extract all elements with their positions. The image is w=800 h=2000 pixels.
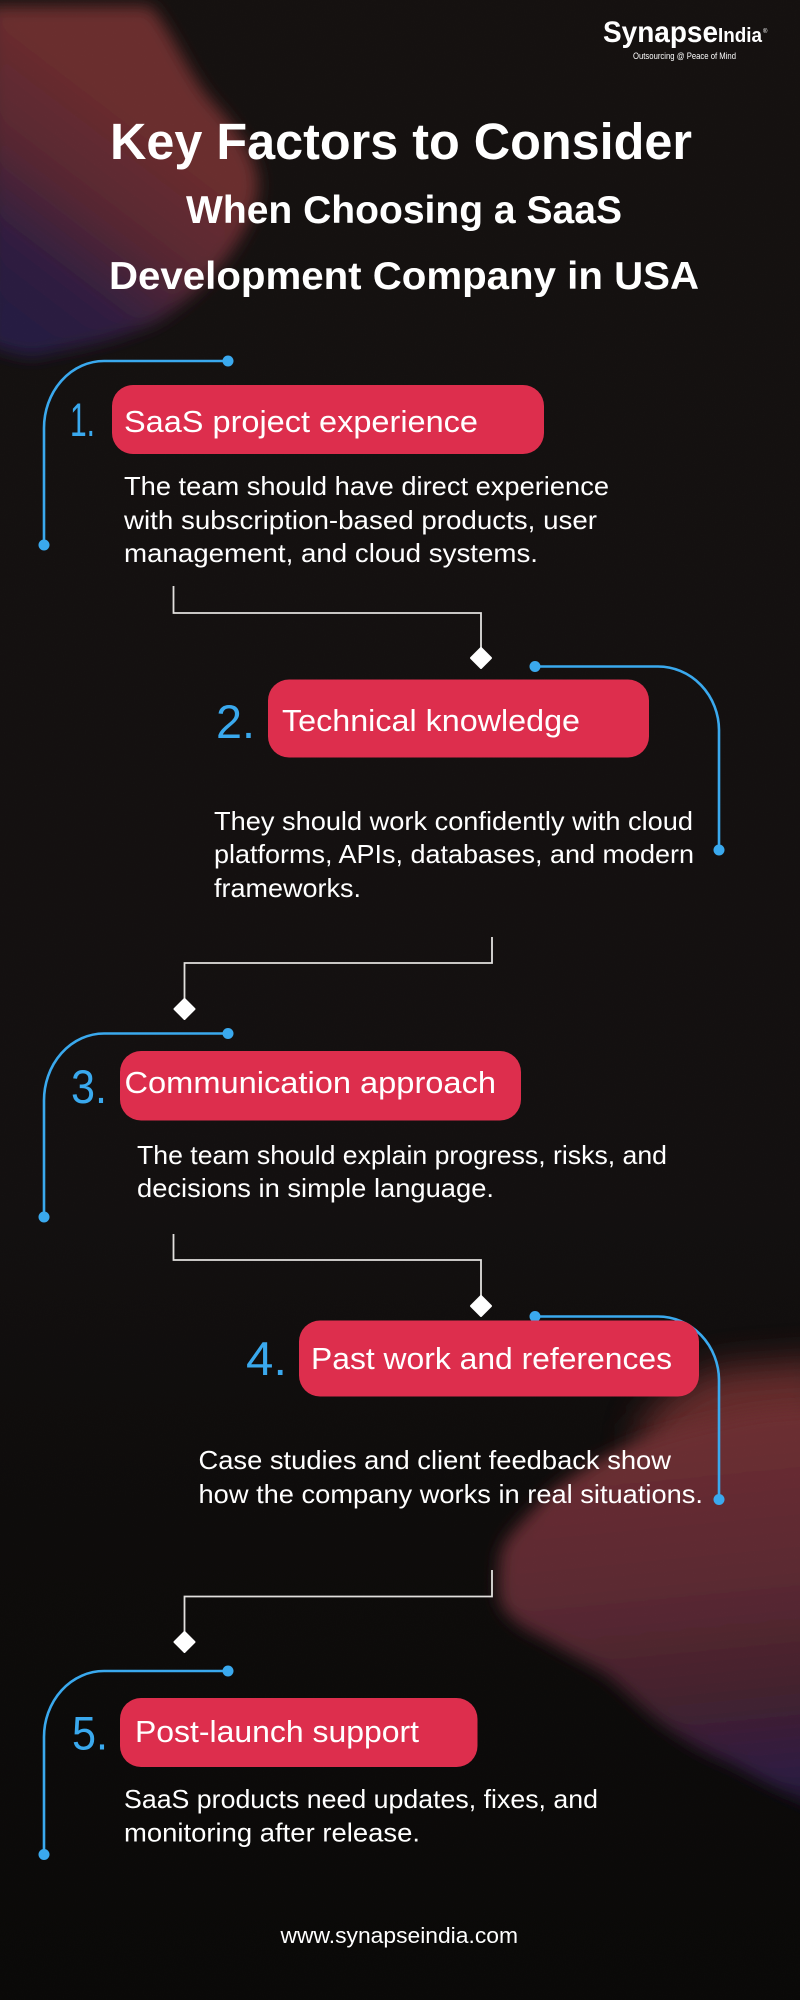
heading pill: step 4: Past work and references xyxy=(311,1341,672,1376)
connector: step 4 to 5 xyxy=(174,1570,492,1652)
title: When Choosing a SaaS xyxy=(186,189,622,232)
body text: step 1: management, and cloud systems. xyxy=(124,538,538,568)
logo xyxy=(603,16,768,62)
connector: step 3 to 4 xyxy=(174,1234,491,1316)
bracket: step 1 xyxy=(38,356,234,550)
body text: step 2 xyxy=(214,806,694,903)
heading pill: step 3 xyxy=(120,1051,521,1120)
panel: step 5 xyxy=(38,1666,598,1860)
logo: Synapse xyxy=(603,16,718,49)
logo: ® xyxy=(763,28,768,35)
connector: step 1 to 2 xyxy=(174,586,491,668)
number: 1: 1. xyxy=(70,393,95,446)
footer url: www.synapseindia.com xyxy=(279,1923,518,1948)
title: Key Factors to Consider xyxy=(110,113,692,170)
bracket: step 2 xyxy=(530,661,724,856)
number: 3: 3. xyxy=(71,1060,107,1113)
body text: step 2: frameworks. xyxy=(214,873,361,903)
panel: step 4 xyxy=(198,1311,724,1509)
body text: step 3 xyxy=(137,1140,667,1203)
body text: step 5: monitoring after release. xyxy=(124,1818,420,1848)
body text: step 4: how the company works in real situations. xyxy=(198,1479,703,1509)
bracket: step 4 xyxy=(530,1311,724,1505)
panel: step 3 xyxy=(38,1028,667,1222)
panel: step 2 xyxy=(214,661,724,903)
body text: step 3: decisions in simple language. xyxy=(137,1173,494,1203)
body text: step 3: The team should explain progress, risks, and xyxy=(137,1140,667,1170)
heading pill: step 5 xyxy=(120,1698,478,1767)
number: 5: 5. xyxy=(72,1706,108,1760)
blob: bottom right xyxy=(499,1360,800,1815)
title xyxy=(109,113,699,298)
heading pill: step 1 xyxy=(112,385,544,454)
number: 2: 2. xyxy=(216,695,255,748)
title: Development Company in USA xyxy=(109,255,699,298)
logo: India xyxy=(718,25,763,47)
number: 4: 4. xyxy=(246,1332,287,1385)
heading pill: step 2 xyxy=(268,680,649,758)
body text: step 2: They should work confidently with cloud xyxy=(214,806,693,836)
body text: step 5: SaaS products need updates, fixes, and xyxy=(124,1784,598,1814)
bracket: step 3 xyxy=(38,1028,234,1222)
panel: step 1 xyxy=(38,356,609,568)
blob: top left xyxy=(0,6,258,357)
heading pill: step 5: Post-launch support xyxy=(135,1714,419,1749)
body text: step 2: platforms, APIs, databases, and modern xyxy=(214,839,694,869)
body text: step 1: with subscription-based products, user xyxy=(123,505,597,535)
heading pill: step 3: Communication approach xyxy=(124,1065,496,1100)
heading pill: step 4 xyxy=(299,1320,699,1396)
body text: step 4: Case studies and client feedback show xyxy=(198,1445,671,1475)
heading pill: step 1: SaaS project experience xyxy=(124,404,478,439)
body text: step 4 xyxy=(198,1445,703,1509)
bracket: step 5 xyxy=(38,1666,234,1860)
body text: step 5 xyxy=(124,1784,598,1848)
logo: Outsourcing @ Peace of Mind xyxy=(633,51,736,62)
body text: step 1: The team should have direct experience xyxy=(124,471,609,501)
body text: step 1 xyxy=(123,471,609,568)
heading pill: step 2: Technical knowledge xyxy=(282,703,580,738)
connector: step 2 to 3 xyxy=(174,937,492,1019)
